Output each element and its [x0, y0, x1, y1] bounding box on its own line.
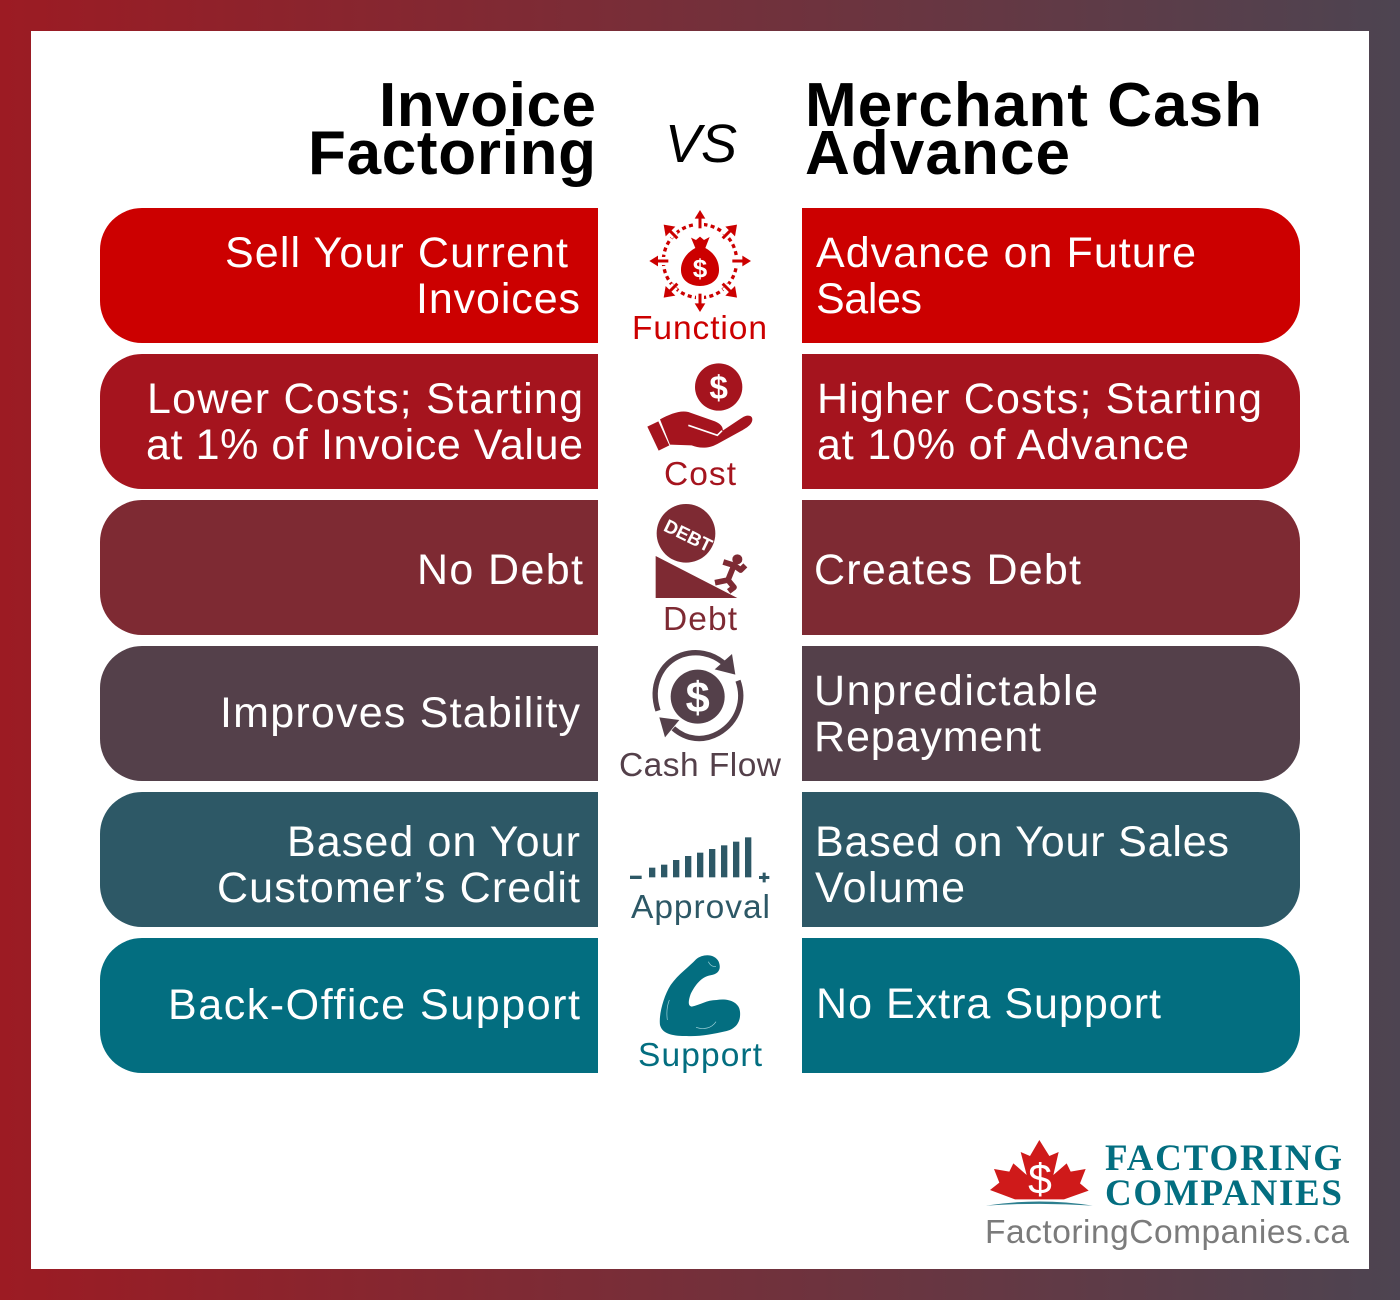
icon: flexed arm — [660, 955, 740, 1036]
website: FactoringCompanies.ca — [985, 1214, 1349, 1251]
heading: Merchant Cash Advance — [805, 71, 1262, 188]
panel: cost row right — [802, 354, 1300, 489]
logo: Factoring Companies — [985, 1138, 1349, 1251]
panel: debt row left: No Debt — [417, 546, 583, 594]
heading: VS: VS — [665, 114, 737, 174]
logo: Factoring Companies: COMPANIES — [1105, 1173, 1342, 1214]
icon: circular cash flow: $ — [686, 674, 710, 722]
label: Cash Flow: Cash Flow — [619, 747, 782, 784]
label: Cost: Cost — [664, 456, 737, 493]
heading: Merchant Cash Advance: Merchant Cash — [805, 71, 1262, 140]
icon: debt boulder and runner: DEBT — [661, 515, 716, 556]
panel: cash flow row left: Improves Stability — [220, 689, 580, 737]
label: Support: Support — [638, 1037, 763, 1074]
panel: cost row right: at 10% of Advance — [817, 421, 1189, 469]
panel: approval row right — [802, 792, 1300, 927]
label: Function: Function — [632, 310, 767, 347]
panel: cost row left: Lower Costs; Starting — [147, 375, 583, 423]
panel: approval row right: Based on Your Sales — [815, 818, 1229, 866]
panel: approval row left: Based on Your — [287, 818, 580, 866]
icon: rising bars — [630, 837, 769, 882]
panel: function row right: Sales — [816, 275, 922, 323]
panel: support row right: No Extra Support — [816, 980, 1161, 1028]
panel: approval row left: Customer’s Credit — [217, 864, 580, 912]
panel: cost row left — [100, 354, 598, 489]
panel: approval row left — [100, 792, 598, 927]
icon: maple leaf with dollar sign — [986, 1140, 1093, 1206]
icon: debt boulder and runner — [655, 503, 745, 598]
panel: cost row left: at 1% of Invoice Value — [146, 421, 583, 469]
panel: support row right — [802, 938, 1300, 1073]
panel: cost row right: Higher Costs; Starting — [817, 375, 1262, 423]
panel: debt row right: Creates Debt — [814, 546, 1081, 594]
panel: cash flow row right: Unpredictable — [814, 667, 1098, 715]
panel: support row left — [100, 938, 598, 1073]
panel: support row left: Back-Office Support — [168, 981, 580, 1029]
heading: Invoice Factoring: Factoring — [308, 119, 596, 188]
panel: cash flow row left — [100, 646, 598, 781]
heading: Invoice Factoring — [308, 71, 596, 188]
icon: circular cash flow — [655, 653, 741, 739]
label: Approval: Approval — [631, 889, 770, 926]
panel: function row right — [802, 208, 1300, 343]
wordmark: FACTORING — [1105, 1138, 1342, 1179]
heading: Invoice Factoring: Invoice — [379, 71, 596, 140]
panel: function row left: Invoices — [416, 275, 580, 323]
panel: debt row right — [802, 500, 1300, 635]
panel: approval row right: Volume — [815, 864, 965, 912]
heading: Merchant Cash Advance: Advance — [805, 119, 1070, 188]
panel: function row left: Sell Your Current — [225, 229, 568, 277]
label: Debt: Debt — [663, 601, 738, 638]
panel: cash flow row right: Repayment — [814, 713, 1041, 761]
panel: function row left — [100, 208, 598, 343]
panel: debt row left — [100, 500, 598, 635]
panel: cash flow row right — [802, 646, 1300, 781]
icon: hand holding dollar coin — [647, 363, 752, 451]
panel: function row right: Advance on Future — [816, 229, 1196, 277]
icon: money bag with arrows — [649, 210, 751, 312]
icon: money bag with arrows: $ — [693, 254, 708, 284]
icon: maple leaf with dollar sign: $ — [1028, 1155, 1052, 1203]
icon: hand holding dollar coin: $ — [709, 370, 728, 407]
